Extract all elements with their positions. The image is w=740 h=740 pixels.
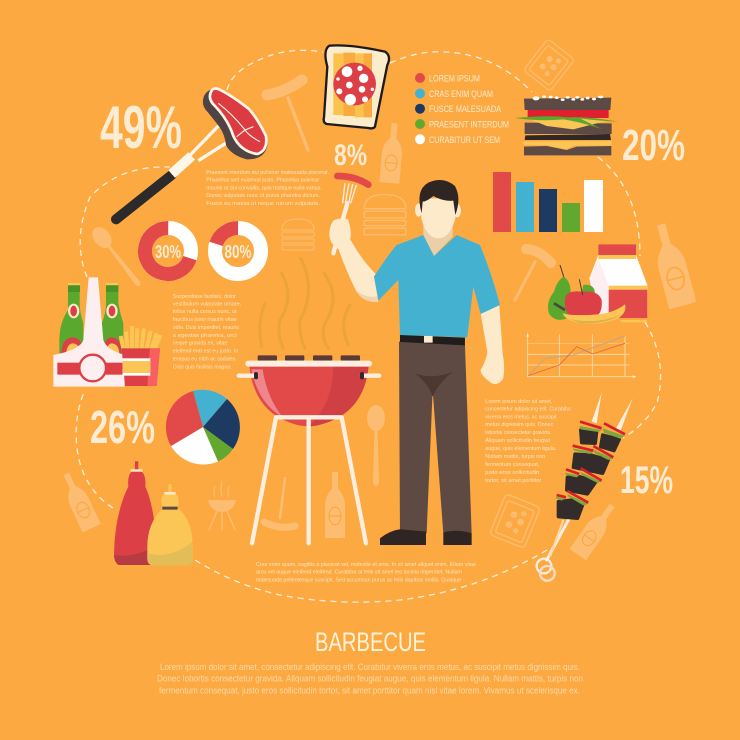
text block: left column: tempus eu nibh ac sodales. <box>173 356 237 362</box>
text block: right column: lobortis consectetur gravida. <box>485 430 552 436</box>
description paragraph: fermentum consequat, justo eros sollicitudin tortor, sit amet porttitor quam nisl vitae lorem. Vivamus ut scelerisque ex. <box>159 686 580 696</box>
legend: PRAESENT INTERDUM <box>429 120 509 130</box>
icon: ketchup and mustard bottles <box>114 461 193 565</box>
legend: CRAS ENIM QUAM <box>429 89 493 100</box>
ghost icons background <box>57 39 696 560</box>
text block: left column: faucibus justo mauris vitae <box>173 317 237 323</box>
percentage 26%: 26% <box>90 401 155 453</box>
donut chart 80% <box>209 222 267 280</box>
dashed route line <box>76 50 661 602</box>
legend: LOREM IPSUM <box>429 74 480 84</box>
text block: left column: Cras quis facilisis magna. <box>173 364 232 370</box>
text block: right column: viverra eros metus, ac suscipit <box>485 414 557 420</box>
text block: right column: tortor, sit amet porttitor <box>485 478 541 484</box>
icon: kettle grill <box>239 258 379 543</box>
text block: below grill: malesuada pellentesque suscipit. Sed accumsan purus ac felis dapibus mollis. Quisque <box>256 578 461 584</box>
man holding sausage on fork <box>329 176 504 545</box>
pie chart <box>166 390 240 464</box>
icon: kebab skewers <box>537 393 633 581</box>
icon: sandwich <box>515 95 618 155</box>
text block: right column: Nullam mattis, turpis non <box>485 454 545 460</box>
text block: left column: a egestas pharetra, orci <box>173 333 237 339</box>
text block: steak note: Donec vulputate nunc id purus pharetra dictum. <box>206 193 320 199</box>
legend: FUSCE MALESUADA <box>429 104 502 115</box>
description paragraph <box>157 662 583 696</box>
text block: below grill <box>256 562 476 584</box>
text block: steak note: Fusce eu massa ut neque rutrum vulputate. <box>206 201 320 207</box>
text block: right column: Aliquam sollicitudin feugiat <box>485 438 550 444</box>
text block: left column: odio. Duis imperdiet, mauris <box>173 325 239 331</box>
text block: right column: consectetur adipiscing elit. Curabitur <box>485 406 571 412</box>
text block: left column: neque gravida ex, vitae <box>173 340 227 346</box>
text block: right column: metus dignissim quis. Donec <box>485 422 553 428</box>
text block: steak note: mauris ut dui convallis, quis tristique nulla varius. <box>206 186 322 192</box>
icon: steak on carving fork <box>116 88 267 219</box>
donut chart 30%: 30% <box>155 242 181 262</box>
legend <box>415 73 509 146</box>
icon: toast with salami <box>324 45 389 128</box>
title: BARBECUE <box>315 627 426 657</box>
bar chart <box>493 172 603 232</box>
description paragraph: Lorem ipsum dolor sit amet, consectetur adipiscing elit. Curabitur viverra eros metus, ac suscipit metus dignissim quis. <box>160 662 580 673</box>
text block: right column: fermentum consequat, <box>485 462 540 468</box>
description paragraph: Donec lobortis consectetur gravida. Aliquam sollicitudin feugiat augue, quis elementum ligula. Nullam mattis, turpis non <box>157 674 583 684</box>
text block: steak note: Praesent interdum dui pulvinar malesuada placerat. <box>206 170 329 176</box>
text block: right column: justo eros sollicitudin <box>484 470 539 476</box>
percentage 49%: 49% <box>100 94 182 161</box>
text block: left column <box>173 294 242 370</box>
text block: steak note <box>206 170 329 207</box>
text block: right column: Lorem ipsum dolor sit amet, <box>485 399 553 405</box>
text block: right column: augue, quis elementum ligula. <box>485 446 557 452</box>
percentage 8%: 8% <box>334 139 367 172</box>
line chart <box>526 333 637 378</box>
text block: left column: vestibulum vulputate ornare, <box>173 302 242 308</box>
percentage 15%: 15% <box>620 459 673 502</box>
text block: left column: tellus nulla cursus nunc, ut <box>173 309 237 315</box>
icon: beer pack and fries <box>53 277 161 387</box>
text block: left column: Suspendisse facilisis, dolor <box>173 294 236 300</box>
donut chart 30% <box>139 222 197 280</box>
donut chart 80%: 80% <box>224 242 252 262</box>
icon: fruits and milk carton <box>548 244 647 324</box>
text block: below grill: arcu vel augue eleifend eleifend. Curabitur at felis sit amet leo lacinia imperdiet. Nullam <box>256 570 462 576</box>
text block: right column <box>484 399 571 484</box>
text block: steak note: Phasellus sed euismod justo. Phasellus pulvinar <box>206 178 319 184</box>
text block: below grill: Cras enim quam, sagittis a placerat vel, molestie et eros. In sit amet aliquet enim. Etiam vitae <box>256 562 476 568</box>
percentage 20%: 20% <box>622 121 685 170</box>
legend: CURABITUR UT SEM <box>429 135 500 146</box>
text block: left column: eleifend erat est eu justo. In <box>173 348 238 354</box>
